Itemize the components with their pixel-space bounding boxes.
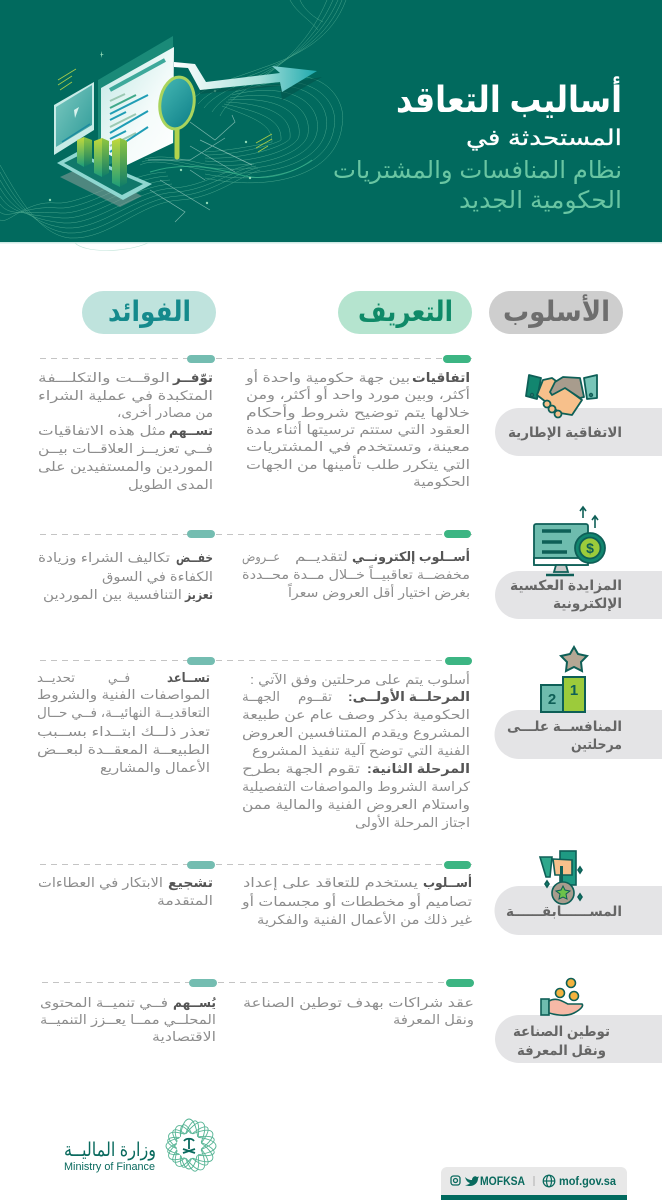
benefits text: تعزيز — [184, 587, 213, 602]
icon: hand holding medal — [540, 851, 582, 904]
definition text: أكثر، وبين مورد واحد أو أكثر، ومن — [246, 386, 470, 403]
column heading: definition — [338, 291, 472, 334]
definition text: العقود التي ستتم ترسيتها أثناء مدة — [246, 421, 470, 438]
benefits text: الأعمال والمشاريع — [100, 759, 210, 776]
definition text: تصاميم أو مخططات أو مجسمات أو — [241, 893, 472, 910]
definition text: بين جهة حكومية واحدة أو — [245, 369, 410, 386]
benefits text: الوقــت والتكلـــفة — [38, 370, 170, 386]
benefits text: يُســهم — [173, 995, 216, 1010]
column heading: method: الأسلوب — [503, 294, 610, 328]
definition text: يستخدم للتعاقد على إعداد — [243, 875, 418, 890]
title block: المستحدثة في — [466, 125, 622, 151]
definition text: عقد شراكات بهدف توطين الصناعة — [243, 995, 474, 1011]
benefits text: الموردين والمستفيدين على — [38, 459, 213, 475]
column heading: definition: التعريف — [358, 296, 453, 328]
column heading: benefits — [82, 291, 216, 334]
label: two-stage — [494, 710, 662, 759]
definition text — [242, 548, 470, 601]
trend arrow — [174, 62, 322, 100]
icon: monitor with coin: $ — [586, 540, 594, 556]
decorative wave lines — [0, 0, 346, 238]
footer contact box: MOFKSA — [480, 1174, 525, 1188]
benefits text: فــي تنميــة المحتوى — [40, 995, 168, 1011]
row 2: reverse electronic auction — [38, 507, 662, 619]
title block: نظام المنافسات والمشتريات — [333, 157, 622, 184]
definition text: مخفضــة تعاقبيــاً خــلال مــدة محــددة — [242, 565, 470, 582]
title block: الحكومية الجديد — [459, 187, 622, 214]
benefits text: المتكبدة في عملية الشراء — [38, 388, 213, 404]
benefits text: خفــض — [176, 550, 213, 565]
benefits text: فــي تعزيــز العلاقــات بيــن — [38, 441, 213, 457]
benefits text: المتقدمة — [157, 893, 213, 908]
label: localization — [495, 1015, 662, 1063]
icon: podium and star: 2 — [548, 691, 556, 708]
title block — [333, 76, 622, 214]
definition text — [243, 995, 474, 1028]
label: framework agreement: الاتفاقية الإطارية — [508, 424, 622, 441]
benefits text: تحديــد — [37, 670, 75, 685]
icon: handshake — [526, 375, 597, 418]
bar chart — [77, 137, 127, 187]
definition text: الجهــة — [242, 689, 280, 705]
benefits text: المحلــي ممــا يعــزز التنميــة — [40, 1012, 216, 1028]
label: two-stage: مرحلتين — [571, 736, 622, 753]
divider with markers — [40, 355, 472, 363]
benefits text: تعذر ذلــك ابتــداء بســبب — [37, 724, 210, 740]
tablet base — [57, 152, 152, 200]
icon: podium and star — [541, 647, 587, 712]
definition text: المرحلة الثانية: — [367, 761, 470, 776]
footer contact box — [441, 1167, 627, 1200]
definition text: أســلوب إلكترونــي — [352, 548, 470, 564]
definition text: كراسة الشروط والمواصفات التفصيلية — [242, 779, 471, 795]
ministry logo: Ministry of Finance — [64, 1161, 155, 1173]
divider with markers — [40, 657, 472, 665]
definition text: غير ذلك من الأعمال الفنية والفكرية — [257, 911, 472, 928]
label: reverse auction — [495, 571, 662, 619]
divider with markers — [42, 979, 474, 987]
icon: monitor with coin — [534, 507, 605, 575]
definition text: المرحلــة الأولــى: — [348, 688, 470, 704]
footer contact box: mof.gov.sa — [559, 1174, 616, 1188]
base shadow — [60, 166, 142, 207]
label: reverse auction: الإلكترونية — [553, 595, 622, 612]
benefits text: تســهم — [169, 423, 213, 438]
benefits text — [37, 670, 210, 776]
divider with markers — [40, 861, 472, 869]
benefits text: مثل هذه الاتفاقيات — [38, 423, 166, 438]
definition text: الحكومية بذكر وصف عام عن طبيعة — [242, 707, 470, 723]
benefits text: تشجيع — [168, 875, 213, 890]
benefits text: تســاعد — [167, 670, 210, 685]
column heading: benefits: الفوائد — [108, 296, 191, 328]
definition text: بغرض اختيار أقل العروض سعراً — [288, 583, 470, 601]
label: framework agreement — [495, 408, 662, 456]
logo emblem — [165, 1118, 217, 1174]
icon: twitter — [465, 1176, 479, 1186]
icon: instagram — [451, 1176, 460, 1185]
definition text — [245, 369, 470, 490]
benefits text — [40, 995, 216, 1044]
row 5: localization — [40, 978, 662, 1063]
benefits text: المواصفات الفنية والشروط — [37, 687, 210, 703]
definition text: الفنية التي توضح آلية تنفيذ المشروع — [252, 742, 470, 759]
header banner — [0, 0, 662, 250]
title block: أساليب التعاقد — [396, 76, 622, 120]
magnifier — [157, 75, 197, 157]
benefits text: الاقتصادية — [152, 1029, 216, 1044]
definition text: خلالها يتم توضيح شروط وأحكام — [246, 404, 470, 421]
label: contest: المســــــابقــــــة — [506, 903, 622, 919]
definition text — [241, 874, 472, 928]
icon: hand with coins — [541, 978, 583, 1015]
benefits text — [38, 370, 213, 493]
benefits text — [38, 875, 213, 908]
icon: globe — [543, 1175, 555, 1187]
definition text: لتقديــم — [295, 549, 348, 565]
benefits text: التعاقديــة النهائيــة، فــي حــال — [37, 705, 210, 721]
benefits text: تكاليف الشراء وزيادة — [38, 550, 170, 566]
ministry logo — [64, 1118, 217, 1174]
divider with markers — [40, 530, 472, 538]
label: localization: توطين الصناعة — [513, 1023, 610, 1040]
definition text: أسلوب يتم على مرحلتين وفق الآتي : — [250, 671, 470, 688]
column heading: method — [489, 291, 623, 334]
definition text: معينة، وتستخدم في المشتريات — [246, 439, 470, 455]
definition text: عــروض — [242, 549, 280, 565]
benefits text: الكفاءة في السوق — [102, 569, 213, 585]
circuit lines — [148, 115, 252, 222]
definition text: اتفاقيات — [412, 370, 470, 385]
icon: podium and star: 1 — [570, 682, 578, 699]
benefits text: الطبيعــة المعقــدة لبعــض — [37, 742, 210, 758]
large document panel — [98, 36, 174, 168]
definition text: ونقل المعرفة — [393, 1012, 474, 1028]
benefits text: الابتكار في العطاءات — [38, 875, 163, 891]
definition text: تقــوم — [298, 689, 332, 705]
benefits text: توّفــر — [172, 370, 213, 385]
small video screen — [54, 82, 94, 155]
benefits text: من مصادر أخرى، — [117, 404, 213, 421]
ministry logo: وزارة الماليــة — [64, 1140, 156, 1161]
benefits text: فــي — [108, 670, 130, 685]
sparkle dots and dashes — [49, 51, 251, 204]
benefits text — [38, 550, 213, 603]
benefits text: التنافسية بين الموردين — [43, 587, 182, 603]
definition text: اجتاز المرحلة الأولى — [355, 814, 470, 831]
definition text: الحكومية — [413, 474, 470, 490]
label: localization: ونقل المعرفة — [517, 1042, 606, 1059]
definition text: المشروع ويقدم المتنافسين العروض — [242, 725, 470, 741]
definition text: أســلوب — [423, 874, 472, 890]
row 3: two-stage competition — [37, 647, 662, 831]
definition text — [242, 671, 471, 831]
definition text: التي يتكرر طلب تأمينها من الجهات — [246, 455, 470, 473]
benefits text: المدى الطويل — [128, 477, 213, 493]
definition text: واستلام العروض الفنية والمالية ممن — [242, 797, 470, 813]
row 4: competition — [38, 851, 662, 935]
definition text: تقوم الجهة بطرح — [242, 761, 360, 777]
row 1: framework agreement — [38, 355, 662, 493]
label: two-stage: المنافســة علـــى — [507, 718, 622, 734]
label: reverse auction: المزايدة العكسية — [510, 577, 622, 594]
label: contest — [494, 886, 662, 935]
